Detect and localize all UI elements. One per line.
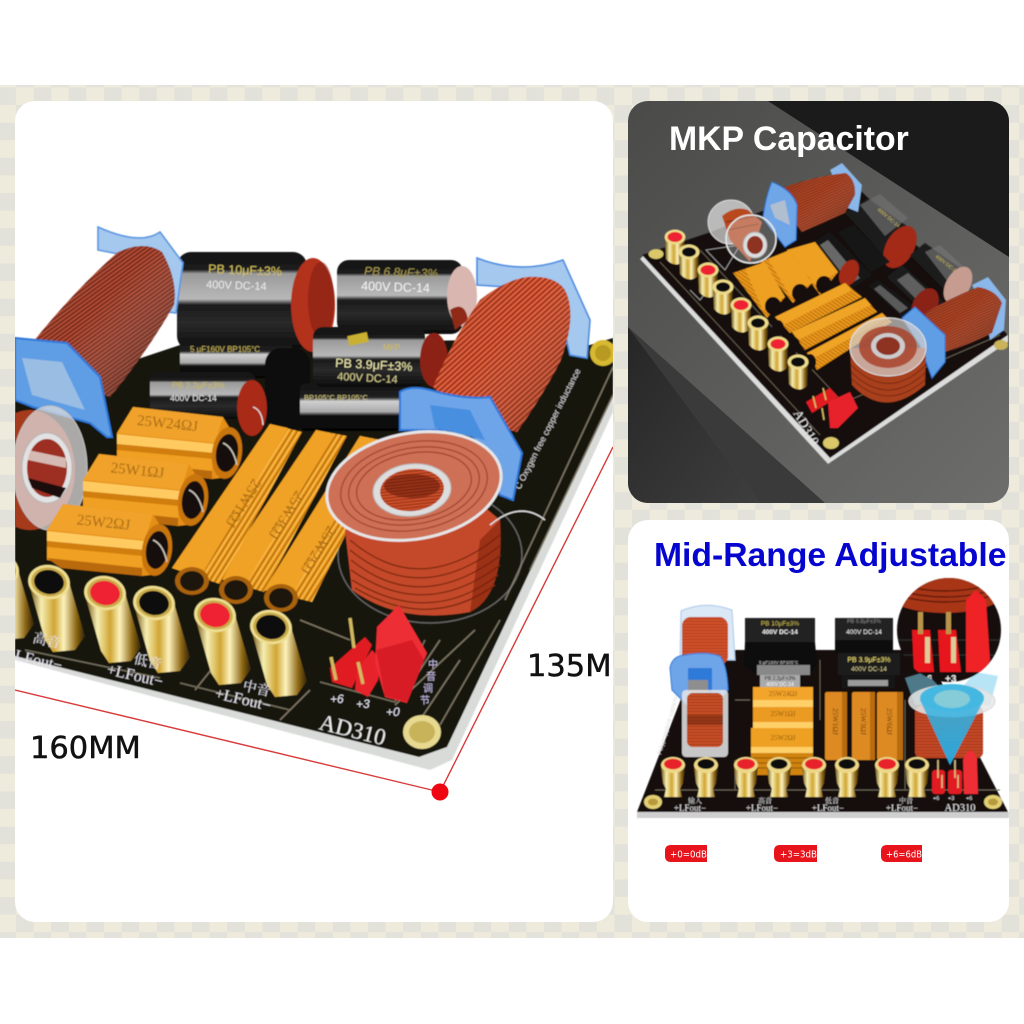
capacitor: MKP PB 3.9uF: MKP — [383, 343, 400, 352]
RCA terminals — [664, 230, 808, 390]
small capacitor rear left: 5 μF160V BP105°C — [190, 345, 260, 354]
resistor: 25W2 ohm: 25W2ΩJ — [76, 512, 131, 534]
mid adjustment silkscreen: 音 — [426, 670, 436, 683]
capacitors — [815, 194, 973, 316]
model number: AD310 — [945, 803, 975, 814]
terminal labels: 低音 — [132, 651, 163, 673]
label: 135MM: 135MM — [527, 649, 638, 684]
inductor coil: front with clear bobbin — [317, 417, 545, 616]
capacitors: 400V DC-14 — [934, 254, 959, 276]
capacitor: PB 2.2uF: PB 2.2μF±3% — [172, 380, 225, 390]
red jumper — [806, 388, 858, 428]
short resistors — [733, 242, 838, 318]
terminal labels: +LFout− — [213, 685, 273, 715]
resistor: 25W1 ohm — [83, 454, 211, 528]
jumper labels: +6 — [330, 692, 344, 706]
tag: +0 equals 0dB — [665, 845, 707, 862]
magnifier inset: jumper pins — [883, 567, 1007, 685]
terminal labels — [13, 629, 273, 715]
heading: MKP Capacitor: MKP Capacitor — [669, 120, 909, 158]
board substrate — [637, 650, 1009, 818]
mid adjustment silkscreen — [420, 658, 438, 707]
board silkscreen note: C Oxygen free copper inductance — [513, 367, 583, 491]
resistor: 25W24 ohm: 25W24ΩJ — [136, 413, 199, 435]
inductor coil: top — [670, 605, 735, 706]
small capacitor rear left — [180, 340, 310, 430]
capacitor: PB 10uF — [744, 618, 817, 675]
resistor: long 25W2 ohm — [264, 436, 392, 612]
capacitor: MKP PB 3.9uF — [313, 327, 448, 387]
long resistors — [772, 283, 892, 370]
magnifier inset: jumper pins: +3 — [945, 674, 957, 685]
capacitor: MKP PB 3.9uF: PB 3.9μF±3% — [335, 356, 413, 374]
vertical resistors — [825, 692, 903, 760]
inductor coil: right rear — [902, 277, 1006, 378]
small capacitors: 5 μF160V BP105°C — [759, 660, 799, 665]
mid adjustment silkscreen: 中 — [428, 658, 438, 671]
mounting holes — [403, 340, 616, 749]
RCA terminals — [661, 757, 929, 797]
mid adjustment silkscreen: 调 — [423, 683, 433, 695]
capacitor: PB 2.2uF: 400V DC-14 — [170, 393, 217, 403]
magnifier inset: jumper pins: +6 — [921, 674, 933, 685]
capacitor: PB 3.9uF — [838, 653, 900, 675]
dimension line: red width and depth — [15, 447, 613, 800]
mid adjustment silkscreen: 节 — [420, 695, 430, 707]
capacitor: PB 10uF: PB 10μF±3% — [761, 620, 799, 628]
capacitor: PB 6.8uF: 400V DC-14 — [361, 279, 430, 295]
inductor coil: rear — [763, 163, 862, 247]
large front inductor coil — [915, 706, 983, 758]
stacked resistors — [751, 687, 813, 775]
photo background — [628, 101, 1009, 503]
capacitor: PB 3.9uF: 400V DC-14 — [851, 666, 887, 673]
resistor: 25W2 ohm — [47, 504, 175, 578]
jumper labels: +3 — [948, 796, 954, 802]
terminal labels: 低音 — [825, 796, 839, 805]
inductor coil: small left with clear bobbin — [15, 404, 88, 532]
inductor coil: rear right — [400, 258, 590, 500]
small capacitor rear right — [300, 383, 400, 431]
panel: Mid-Range Adjustable — [628, 520, 1009, 922]
capacitor: PB 10uF: 400V DC-14 — [206, 279, 267, 293]
jumper labels — [933, 796, 972, 802]
board substrate — [640, 190, 1008, 464]
resistor: 25W24 ohm — [117, 407, 245, 481]
jumper labels — [330, 694, 400, 717]
model number: AD310 — [317, 710, 389, 750]
crossover board photo — [640, 163, 1008, 464]
vertical resistors: 25W3ΩJ — [859, 708, 868, 735]
jumper labels: +0 — [386, 705, 400, 719]
capacitor: PB 6.8uF — [835, 618, 893, 653]
inductor coil: small clear bobbin — [708, 200, 776, 263]
resistor: long 25W3 ohm: 25W3ΩJ — [265, 488, 307, 542]
small capacitors: 400V DC-14 — [766, 682, 794, 688]
crossover board top view — [637, 567, 1009, 818]
silkscreen note: Polypropylene capacitor — [657, 692, 681, 756]
stacked resistors: 25W24ΩJ — [769, 690, 798, 698]
capacitor: PB 10uF — [177, 252, 335, 352]
jumper labels: +6 — [933, 796, 939, 802]
inductor coil: small side view — [682, 690, 728, 757]
capacitor: PB 6.8uF: PB 6.8μF±3% — [847, 619, 881, 625]
terminal labels: +LFout− — [746, 803, 778, 813]
capacitor: PB 2.2uF — [150, 372, 267, 436]
resistor: long 25W1 ohm: 25W1ΩJ — [222, 476, 264, 530]
stacked resistors: 25W2ΩJ — [770, 734, 796, 742]
model number: AD310 — [790, 407, 823, 448]
terminal labels: +LFout− — [886, 803, 918, 813]
capacitors: 400V DC-14 — [876, 207, 901, 229]
terminal labels: 中音 — [899, 796, 913, 805]
inductor coil: rear left — [15, 227, 183, 437]
RCA terminals row — [15, 560, 308, 698]
capacitor: PB 6.8uF: 400V DC-14 — [846, 629, 882, 636]
resistor: long 25W1 ohm — [172, 424, 302, 595]
capacitor: PB 6.8uF: PB 6.8μF±3% — [364, 264, 439, 281]
small capacitors: PB 2.2μF±3% — [765, 676, 796, 682]
heading: Mid-Range Adjustable: Mid-Range Adjustable — [654, 536, 1006, 574]
stacked resistors: 25W1ΩJ — [770, 710, 796, 718]
vertical resistors: 25W6ΩJ — [885, 708, 894, 735]
terminal labels: +LFout− — [674, 803, 706, 813]
tag: +3 equals 3dB — [774, 845, 817, 862]
capacitor: PB 10uF: PB 10μF±3% — [208, 262, 282, 279]
capacitor: PB 3.9uF: PB 3.9μF±3% — [847, 657, 891, 664]
terminal labels: LFout− — [13, 647, 64, 675]
terminal labels: 高音 — [758, 796, 772, 805]
terminal labels — [674, 796, 918, 813]
jumper labels: +6 — [966, 796, 972, 802]
board substrate — [15, 338, 613, 770]
terminal labels: 中音 — [241, 677, 272, 700]
red jumper header — [330, 605, 427, 703]
terminal labels: +LFout− — [105, 661, 165, 691]
inductor coil: front — [850, 318, 926, 402]
terminal labels: 输入 — [688, 796, 702, 805]
capacitor: PB 6.8uF — [337, 260, 477, 334]
capacitor: PB 10uF: 400V DC-14 — [762, 629, 798, 636]
panel: board dimensions close-up — [0, 101, 638, 922]
resistor: long 25W2 ohm: 25W2ΩJ — [297, 523, 339, 577]
jumper pins — [932, 750, 978, 794]
tag: +3 equals 3dB: +3=3dB — [780, 850, 817, 860]
terminal labels: +LFout− — [812, 803, 844, 813]
label: 160MM: 160MM — [30, 731, 141, 766]
capacitor: MKP PB 3.9uF: 400V DC-14 — [337, 371, 398, 386]
tag: +6 equals 6dB: +6=6dB — [886, 850, 922, 860]
tag: +6 equals 6dB — [881, 845, 922, 862]
small capacitor rear right: BP105°C BP105°C — [304, 393, 369, 402]
vertical resistors: 25W1ΩJ — [831, 708, 840, 735]
jumper labels: +3 — [356, 697, 370, 711]
resistor: 25W1 ohm: 25W1ΩJ — [110, 460, 165, 482]
panel: MKP Capacitor — [628, 101, 1009, 503]
resistor: long 25W3 ohm — [217, 430, 347, 604]
tag: +0 equals 0dB: +0=0dB — [670, 850, 707, 860]
board photo: close-up of crossover board — [0, 227, 638, 800]
cyan zoom cone — [905, 672, 998, 765]
small capacitors — [757, 660, 895, 688]
terminal labels: 高音 — [31, 629, 62, 652]
